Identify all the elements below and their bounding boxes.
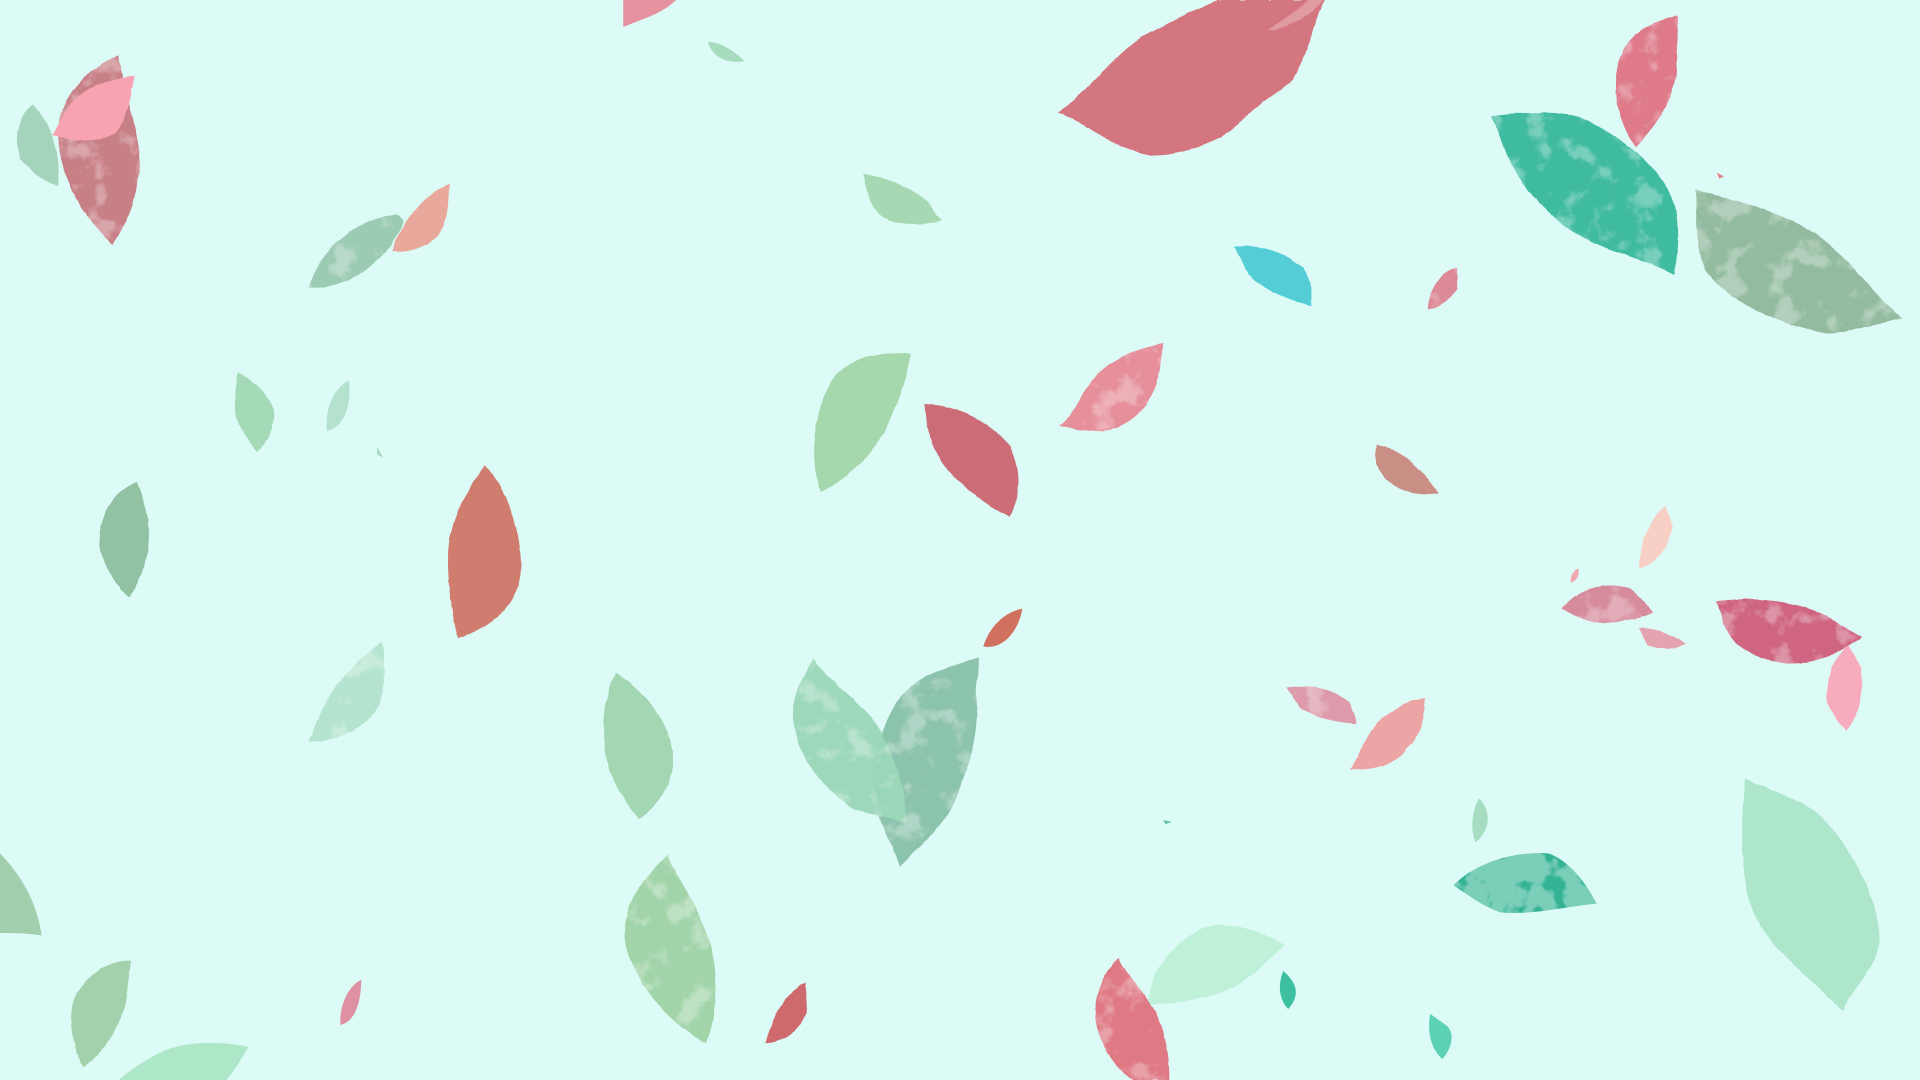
leaf: peach [1638,506,1673,568]
leaf: green centre [814,353,911,492]
leaf: heart left half [793,659,906,823]
leaf: small rust [983,609,1022,647]
leaf: pale mint small [327,381,350,431]
leaf: tiny mint [377,447,383,458]
leaf: green bottom centre [624,855,716,1043]
leaf: small pink bottom [340,980,361,1025]
leaf: red top left [59,55,140,245]
leaf: pale pink behind [1827,645,1862,731]
leaf: green bottom left [71,960,131,1068]
leaf: blue [1234,246,1312,306]
leaf: pink centre right [1059,343,1163,431]
leaf: very pale green [1149,925,1284,1004]
leaf: heart right half [874,658,980,867]
leaf: small teal [1280,971,1296,1009]
leaf: brown [1375,444,1439,494]
leaf: large red top [1058,0,1325,156]
leaf: green lower centre [604,672,673,819]
leaf: pink overlapping [51,76,135,140]
leaf: green upper left [309,214,404,288]
leaf: teal mottled [1453,853,1597,913]
leaf: red top right [1615,15,1678,147]
leaf: small mint top [708,42,744,62]
leaf: green left [99,481,149,598]
leaf: red centre left [448,465,521,638]
leaf: dark red centre [924,404,1018,517]
leaf: red bottom [1095,959,1169,1080]
leaf: tiny teal [1163,820,1172,824]
leaf: dark red bottom [765,983,807,1043]
leaf: tiny red [1717,173,1724,179]
leaf: salmon [1349,698,1425,769]
leaf: pink top edge [623,0,676,27]
leaf: salmon upper left [392,184,449,252]
leaf: small pink [1428,267,1457,309]
leaf: tiny pink [1571,568,1579,583]
leaf: grey green right [1696,190,1903,333]
leaf: mauve pink [1287,686,1357,724]
leaf: pale mint left [309,642,385,742]
leaf: small pale pink [1638,628,1686,649]
leaf: left edge green [0,853,42,936]
leaf: small mint [1472,798,1488,842]
leaf: green top centre [863,174,942,224]
leaf: pale bottom edge [119,1043,249,1080]
leaf: dark pink [1717,599,1862,664]
leaf: green small left [234,372,274,452]
leaf: teal large [1491,113,1678,274]
leaf: pink grey [1561,585,1653,623]
leaf: small aqua [1429,1014,1452,1059]
leaf: green far left [17,104,59,186]
leaf: pale green large [1742,779,1880,1011]
